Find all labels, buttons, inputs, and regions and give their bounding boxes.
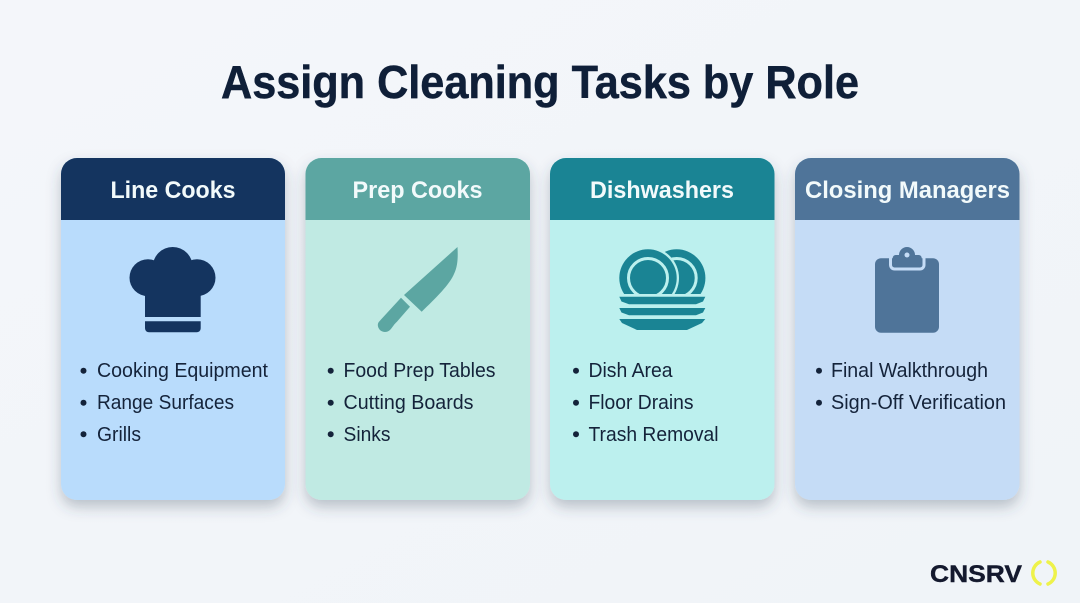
icon: chef hat: [130, 247, 216, 332]
heading: line cooks: Line Cooks: [110, 177, 236, 204]
heading: prep cooks: Prep Cooks: [352, 177, 482, 204]
icon: stacked plates: [617, 247, 705, 330]
task list: prep cooks: Food Prep Tables: [344, 360, 496, 382]
task list: closing managers: Final Walkthrough: [831, 360, 988, 382]
panel: dishwashers: [550, 158, 774, 500]
title: Assign Cleaning Tasks by Role: [221, 56, 859, 108]
heading: dishwashers: Dishwashers: [590, 177, 734, 204]
panel: closing managers: [795, 158, 1020, 500]
logo: CNSRV: [930, 561, 1055, 588]
logo: CNSRV: CNSRV: [930, 561, 1022, 588]
task list: line cooks: Grills: [97, 424, 141, 446]
panel: prep cooks: [306, 158, 530, 500]
task list: line cooks: Cooking Equipment: [97, 360, 268, 382]
task list: prep cooks: Cutting Boards: [344, 392, 474, 414]
task list: prep cooks: Sinks: [344, 424, 390, 446]
task list: line cooks: Range Surfaces: [97, 392, 234, 414]
icon: clipboard: [875, 247, 939, 333]
header: line cooks: [61, 158, 285, 220]
heading: closing managers: Closing Managers: [805, 177, 1010, 204]
task list: dishwashers: Trash Removal: [588, 424, 718, 446]
icon: logo ring: [1033, 562, 1055, 584]
icon: knife: [378, 247, 458, 332]
panel: line cooks: [61, 158, 285, 500]
task list: closing managers: Sign-Off Verification: [831, 392, 1006, 414]
task list: line cooks: [80, 360, 268, 446]
header: closing managers: [795, 158, 1020, 220]
task list: closing managers: [816, 360, 1006, 414]
task list: dishwashers: Floor Drains: [588, 392, 694, 414]
task list: dishwashers: Dish Area: [588, 360, 673, 382]
header: dishwashers: [550, 158, 774, 220]
task list: dishwashers: [573, 360, 718, 446]
header: prep cooks: [306, 158, 530, 220]
task list: prep cooks: [328, 360, 496, 446]
